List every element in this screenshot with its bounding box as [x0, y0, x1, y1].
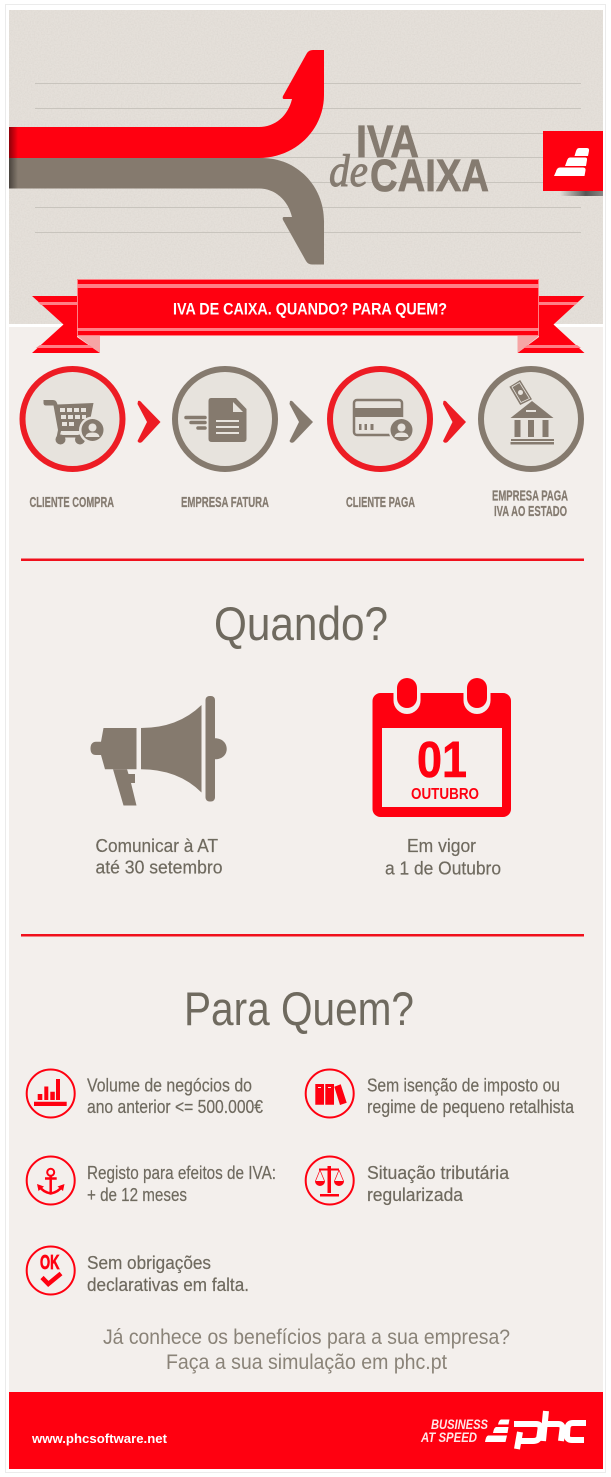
text: isencao: [367, 1074, 575, 1117]
title: IVA: [356, 116, 419, 167]
icon: calendar: [372, 672, 511, 817]
step labels: EMPRESA PAGA: [492, 488, 568, 504]
arrow: chevron 3: [443, 401, 466, 443]
arrow: red up: [9, 50, 324, 158]
step labels: CLIENTE PAGA: [346, 494, 415, 511]
icon: credit card: [354, 400, 414, 443]
footer tagline: [420, 1416, 489, 1445]
text: registo: [87, 1162, 276, 1205]
text: em vigor: a 1 de Outubro: [385, 858, 501, 878]
arrow: chevron 1: [138, 401, 160, 443]
icon: shopping cart: [44, 400, 106, 444]
icon: megaphone: [90, 696, 227, 806]
text: isencao: Sem isenção de imposto ou: [367, 1074, 560, 1096]
step: empresa paga: [481, 369, 581, 469]
text: em vigor: [385, 835, 501, 878]
icon: anchor: [27, 1156, 75, 1204]
icon: document: [186, 398, 246, 442]
text: volume: ano anterior <= 500.000€: [87, 1096, 264, 1117]
heading: Quando: Quando?: [214, 597, 388, 650]
icon: scales: [306, 1156, 354, 1204]
logo tab: [543, 131, 603, 196]
icon: volume chart: [27, 1070, 75, 1118]
text: call to action: [103, 1326, 510, 1374]
text: comunicar: [96, 835, 222, 878]
text: situacao: [367, 1162, 510, 1205]
footer logo: [485, 1411, 586, 1449]
text: situacao: regularizada: [367, 1184, 464, 1205]
text: volume: [87, 1074, 264, 1117]
icon: ok check: OK: [40, 1252, 60, 1274]
text: obrigacoes: [87, 1252, 249, 1295]
step: cliente paga: [330, 369, 430, 469]
text: situacao: Situação tributária: [367, 1162, 510, 1183]
title: [329, 116, 489, 201]
text: em vigor: Em vigor: [407, 835, 476, 856]
text: obrigacoes: declarativas em falta.: [87, 1274, 249, 1295]
text: obrigacoes: Sem obrigações: [87, 1252, 211, 1273]
text: registo: + de 12 meses: [87, 1184, 187, 1205]
step labels: EMPRESA FATURA: [181, 494, 269, 511]
icon: books: [306, 1070, 354, 1118]
text: comunicar: Comunicar à AT: [96, 835, 218, 856]
text: volume: Volume de negócios do: [87, 1074, 252, 1096]
step labels: IVA AO ESTADO: [494, 503, 567, 520]
panel: header: [9, 10, 603, 324]
title: CAIXA: [370, 150, 489, 201]
step labels: [30, 488, 568, 520]
step: empresa fatura: [175, 369, 275, 469]
icon: calendar: 01: [417, 731, 467, 788]
heading: Para Quem: Para Quem?: [184, 982, 414, 1035]
icon: ok check: [27, 1246, 75, 1294]
step labels: CLIENTE COMPRA: [30, 494, 114, 511]
text: comunicar: até 30 setembro: [96, 856, 222, 878]
text: call to action: Já conhece os benefícios para a sua empresa?: [103, 1326, 510, 1349]
panel: body background: [9, 327, 603, 1392]
footer tagline: BUSINESS: [431, 1416, 489, 1432]
text: registo: Registo para efeitos de IVA:: [87, 1162, 276, 1183]
arrow: grey down: [9, 158, 324, 264]
ribbon banner: [32, 279, 584, 353]
title: de: [329, 145, 368, 196]
step: cliente compra: [22, 369, 122, 469]
icon: bank and banknote: [509, 380, 554, 444]
ribbon banner: IVA DE CAIXA. QUANDO? PARA QUEM?: [173, 300, 447, 318]
text: isencao: regime de pequeno retalhista: [367, 1096, 575, 1117]
footer url: www.phcsoftware.net: [31, 1431, 168, 1446]
text: call to action: Faça a sua simulação em phc.pt: [166, 1351, 447, 1374]
icon: calendar: OUTUBRO: [411, 786, 479, 803]
footer tagline: AT SPEED: [420, 1429, 477, 1445]
panel: footer: [9, 1392, 603, 1469]
arrow: chevron 2: [290, 401, 313, 443]
